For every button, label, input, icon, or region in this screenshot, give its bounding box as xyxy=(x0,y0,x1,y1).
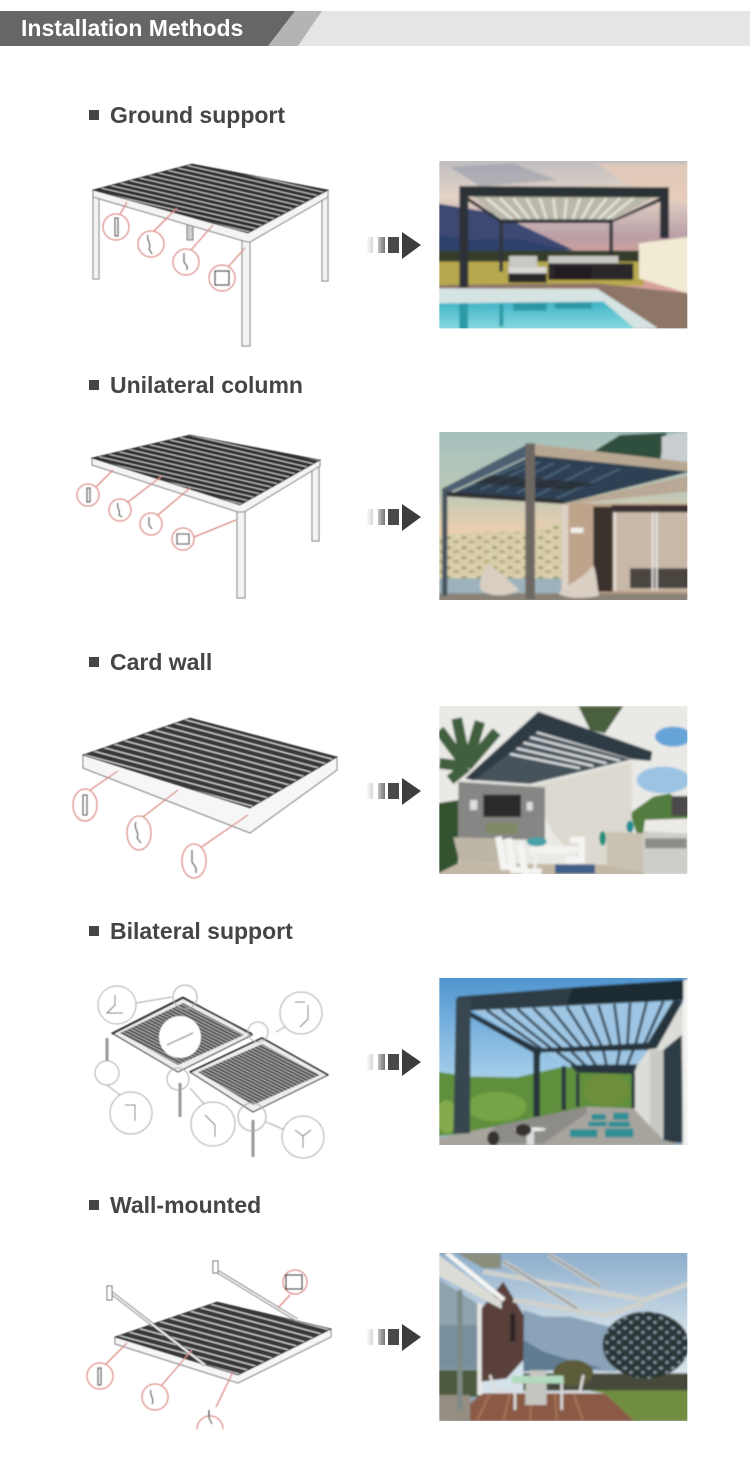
header banner xyxy=(0,11,750,46)
heading: Ground support: Ground support xyxy=(110,102,285,128)
arrow xyxy=(367,1324,421,1351)
diagram: bilateral support exploded view xyxy=(95,985,328,1158)
photo: retractable awning over deck xyxy=(437,1250,690,1423)
heading: Card wall: Card wall xyxy=(110,649,212,675)
diagram: unilateral column pergola xyxy=(77,435,320,598)
detail callouts xyxy=(73,771,248,878)
heading: Wall-mounted: Wall-mounted xyxy=(110,1192,261,1218)
heading: Unilateral column: Unilateral column xyxy=(110,372,303,398)
detail callouts xyxy=(87,1270,307,1429)
title: Installation Methods xyxy=(21,15,243,41)
diagram: wall-mounted roof xyxy=(87,1261,331,1429)
detail callouts xyxy=(77,470,236,550)
detail callouts xyxy=(103,202,245,291)
arrow xyxy=(367,778,421,805)
arrow xyxy=(367,504,421,531)
photo: outdoor kitchen with wall-mounted roof xyxy=(437,703,692,877)
photo: hillside terrace pergola xyxy=(437,975,690,1148)
detail circles xyxy=(95,985,324,1158)
centre detail xyxy=(159,1016,201,1058)
diagram: card wall roof xyxy=(73,718,337,878)
photo: poolside pergola xyxy=(437,158,690,332)
arrow xyxy=(367,1049,421,1076)
diagram: ground support pergola xyxy=(93,164,328,346)
support arms xyxy=(107,1261,297,1365)
photo: terrace with sliding doors xyxy=(437,430,690,603)
arrow xyxy=(367,232,421,259)
heading: Bilateral support: Bilateral support xyxy=(110,918,293,944)
